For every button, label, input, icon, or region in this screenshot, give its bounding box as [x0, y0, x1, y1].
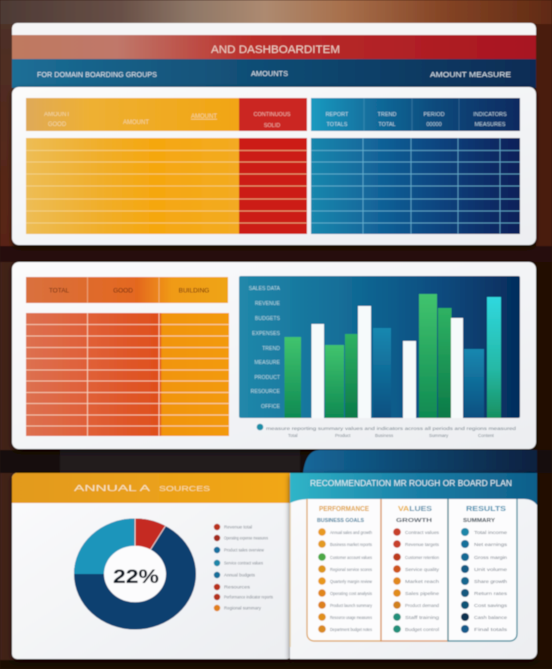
panel: donut chart	[12, 473, 292, 659]
column: blue list: Net earnings	[474, 542, 508, 547]
donut legend: Regional summary	[224, 606, 262, 610]
column: orange list: Operating cost analysis	[330, 591, 373, 596]
donut legend: Revenue total	[224, 524, 252, 530]
column: red list: GROWTH	[396, 518, 432, 524]
column: red list	[381, 499, 448, 641]
table rows: warm	[26, 138, 307, 234]
column: blue list: Return rates	[474, 591, 508, 596]
column: blue list: Total income	[474, 530, 508, 535]
column: orange list: Department budget notes	[330, 627, 373, 632]
table header: orange: BUILDING	[179, 288, 209, 294]
chart legend	[257, 424, 517, 438]
subtitle bar: AMOUNT MEASURE	[430, 70, 511, 79]
list frame	[307, 499, 517, 641]
table header: cool columns: MEASURES	[475, 122, 506, 128]
chart bars	[284, 294, 501, 418]
chart y-axis labels: RESOURCE	[251, 389, 281, 395]
table header: warm columns: AMOUNT	[123, 120, 149, 126]
table header: warm columns: SOLID	[264, 123, 280, 129]
column: orange list: Customer account values	[330, 555, 373, 560]
column: blue list	[448, 499, 517, 641]
heading	[290, 473, 537, 505]
column: blue list: Unit volume	[474, 567, 508, 572]
chart y-axis labels: EXPENSES	[252, 331, 281, 337]
donut legend: Operating expense measures	[224, 536, 268, 540]
chart y-axis labels: BUDGETS	[255, 316, 281, 322]
donut legend	[214, 524, 273, 611]
title bar	[12, 35, 536, 59]
title bar: AND DASHBOARDITEM	[211, 44, 340, 56]
heading: SOURCES	[159, 484, 210, 493]
chart legend: Business	[375, 433, 394, 438]
column: red list: Service quality	[405, 567, 440, 572]
column: blue list: Cost savings	[474, 603, 508, 608]
column: orange list: Annual sales and growth	[330, 530, 372, 535]
donut legend: Annual budgets	[224, 572, 255, 578]
heading	[12, 473, 290, 503]
table header: warm columns: CONTINUOUS	[254, 112, 291, 118]
chart y-axis labels	[249, 286, 281, 410]
table rows: cool	[311, 138, 520, 234]
column: blue list: RESULTS	[466, 506, 506, 513]
chart legend: measure reporting summary values and indicators across all periods and regions measured	[266, 426, 517, 431]
table header: cool columns: REPORT	[326, 112, 349, 118]
column: blue list: Final totals	[474, 627, 508, 632]
table header: warm columns: AMOUNT	[44, 112, 70, 118]
chart y-axis labels: REVENUE	[255, 301, 281, 307]
donut chart	[74, 518, 196, 630]
column: red list: Contract values	[405, 530, 440, 535]
column: red list: Staff training	[405, 615, 440, 620]
table header: orange: TOTAL	[49, 288, 70, 294]
chart y-axis labels: MEASURE	[254, 360, 281, 366]
donut chart: 22%	[113, 567, 159, 588]
column: red list: VA LUES	[398, 506, 432, 513]
column: blue list: Cash balance	[474, 615, 508, 620]
column: orange list: Resource usage measures	[330, 615, 373, 620]
table rows: orange	[26, 313, 229, 436]
table header: warm columns: GOOD	[48, 122, 67, 128]
table header: cool columns: 00000	[426, 122, 442, 128]
chart y-axis labels: SALES DATA	[249, 286, 281, 292]
column: orange list: Business market reports	[330, 542, 373, 547]
heading: RECOMMENDATION MR ROUGH OR BOARD PLAN	[310, 478, 512, 488]
panel: three-column lists	[290, 450, 537, 659]
table header: cool columns: PERIOD	[423, 112, 445, 118]
column: red list: Sales pipeline	[405, 591, 440, 596]
panel: top table	[12, 87, 536, 245]
donut legend: Performance indicator reports	[224, 594, 273, 600]
top banner	[12, 23, 536, 88]
chart legend: Content	[478, 433, 495, 438]
column: red list: Market reach	[405, 579, 440, 584]
column: red list: Budget control	[405, 627, 439, 632]
chart legend: Total	[288, 433, 298, 438]
panel: middle table and chart	[12, 262, 536, 449]
donut legend: Resources	[224, 584, 250, 590]
table header: orange: GOOD	[113, 288, 133, 294]
column: orange list: Product launch summary	[330, 603, 373, 608]
table header: cool columns: TREND	[378, 112, 396, 118]
column: orange list: Regional service scores	[330, 567, 373, 572]
column: blue list: Gross margin	[474, 555, 508, 560]
column: red list: Revenue targets	[405, 542, 440, 547]
column: orange list: BUSINESS GOALS	[317, 518, 364, 524]
column: orange list	[307, 499, 381, 641]
donut legend: Product sales overview	[224, 548, 265, 552]
chart y-axis labels: PRODUCT	[254, 375, 281, 381]
column: red list: Product demand	[405, 603, 440, 608]
column: orange list: PERFORMANCE	[319, 506, 369, 513]
subtitle bar: FOR DOMAIN BOARDING GROUPS	[37, 70, 157, 79]
chart legend: Summary	[429, 433, 449, 438]
table header: cool columns: TOTAL	[378, 122, 396, 128]
bar chart	[239, 276, 520, 418]
column: blue list: Share growth	[474, 579, 508, 584]
table header: warm columns: AMOUNT	[191, 114, 217, 120]
column: red list: Customer retention	[405, 555, 439, 560]
chart y-axis labels: OFFICE	[261, 404, 281, 410]
table header: orange	[26, 277, 228, 303]
column: orange list: Quarterly margin review	[330, 579, 373, 584]
table header: cool columns	[311, 98, 520, 131]
table header: cool columns: INDICATORS	[473, 112, 507, 118]
subtitle bar	[12, 59, 536, 88]
chart legend: Product	[335, 433, 351, 438]
subtitle bar: AMOUNTS	[251, 69, 288, 78]
chart y-axis labels: TREND	[262, 346, 280, 352]
table header: warm columns	[26, 98, 307, 131]
donut legend: Service contract values	[224, 560, 263, 566]
table header: cool columns: TOTALS	[327, 122, 348, 128]
heading: ANNUAL A	[74, 483, 151, 493]
column: blue list: SUMMARY	[463, 518, 495, 524]
